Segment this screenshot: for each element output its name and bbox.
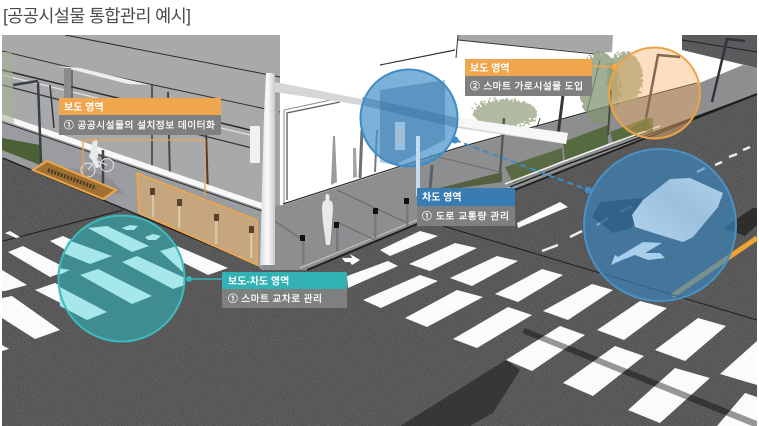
orange planter highlight [33, 161, 116, 199]
callout: smart intersection: ① 스마트 교차로 관리 [228, 293, 322, 305]
magnifier: blue vehicle [583, 148, 737, 302]
direction arrow [611, 242, 665, 265]
callout: sidewalk data: 보도 영역 [64, 100, 104, 114]
left building [2, 35, 280, 207]
yellow centre line [672, 238, 757, 296]
teal callout leader [192, 278, 222, 280]
road centre dashes [542, 147, 750, 251]
asphalt road [2, 84, 757, 426]
magnifier: blue building facility [360, 69, 458, 167]
dark building top right [682, 35, 757, 68]
white backdrop behind buildings [278, 35, 757, 206]
left sidewalk [2, 52, 262, 270]
callout: sidewalk data: ① 공공시설물의 설치정보 데이터화 [64, 120, 215, 132]
callout: road traffic [417, 188, 515, 226]
pole shadow on road [400, 328, 757, 426]
crosswalk stop lines [3, 210, 757, 320]
right sidewalk and corner [262, 65, 757, 270]
callout: smart intersection: 보도-차도 영역 [228, 274, 289, 288]
callout: sidewalk data [59, 98, 221, 135]
signal pole and mast arm [250, 73, 568, 265]
magnifier: orange street facility [608, 47, 700, 139]
callout: smart street facility: ② 스마트 가로시설물 도입 [470, 80, 583, 92]
orange callout leader [592, 64, 618, 70]
pedestrian figure [322, 194, 333, 245]
car [632, 178, 723, 242]
road shadow top right [723, 208, 757, 236]
magnifier: teal crosswalk [58, 214, 192, 342]
pole in front of blue magnifier [416, 136, 420, 196]
callout: road traffic: ① 도로 교통량 관리 [422, 210, 509, 222]
callout: smart intersection [222, 272, 347, 308]
planters and curb [440, 94, 757, 188]
corner fence bollards [300, 198, 409, 264]
orange leader bracket [83, 140, 205, 196]
orange fence highlight [137, 173, 257, 265]
central white building [274, 35, 613, 206]
street trees [473, 52, 643, 175]
callout: smart street facility [465, 59, 592, 96]
car shadow [592, 198, 643, 233]
street lamps top right [646, 39, 745, 118]
title: [공공시설물 통합관리 예시] [3, 6, 191, 26]
cyclist figure [81, 139, 114, 177]
callout: road traffic: 차도 영역 [422, 190, 462, 204]
blue leader dashed line [452, 136, 592, 194]
callout: smart street facility: 보도 영역 [470, 62, 510, 74]
crosswalk bars [2, 202, 757, 426]
